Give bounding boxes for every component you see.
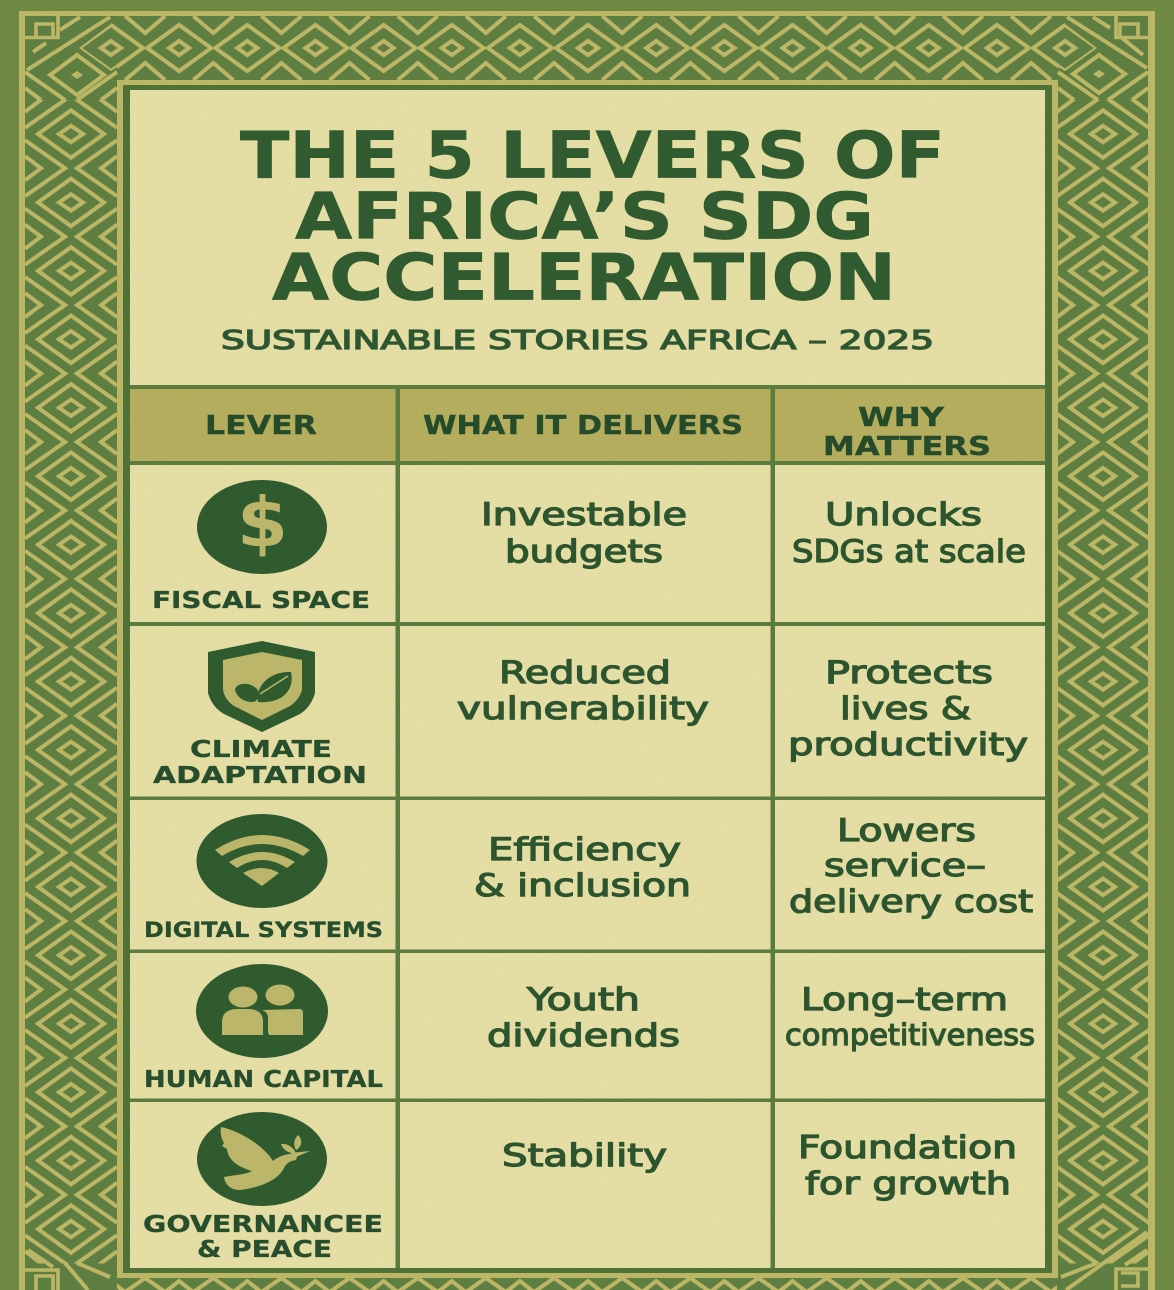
- table header: lever: LEVER: [205, 411, 317, 441]
- why: long-term competitiveness: Long–term: [801, 982, 1008, 1018]
- icon: dove with olive branch: [197, 1112, 327, 1206]
- row 2: climate adaptation: [153, 641, 1028, 789]
- table header: what it delivers: WHAT IT DELIVERS: [423, 411, 743, 441]
- icon: dollar coin: $: [237, 483, 288, 563]
- why: protects lives and productivity: Protects: [825, 655, 993, 691]
- why: lowers service-delivery cost: Lowers: [837, 813, 976, 849]
- corner weave: top left: [25, 16, 117, 100]
- label: governancee and peace: [143, 1212, 383, 1263]
- label: digital systems: DIGITAL SYSTEMS: [144, 918, 383, 942]
- title: THE 5 LEVERS OF: [240, 120, 945, 194]
- table grid lines: [130, 385, 1045, 1268]
- inner panel with frame: [117, 80, 1058, 1278]
- label: governancee and peace: & PEACE: [197, 1237, 332, 1263]
- why: unlocks SDGs at scale: [792, 497, 1026, 570]
- delivers: investable budgets: [481, 497, 687, 570]
- delivers: reduced vulnerability: vulnerability: [457, 691, 709, 727]
- label: governancee and peace: GOVERNANCEE: [143, 1212, 383, 1238]
- why: protects lives and productivity: [788, 655, 1028, 763]
- table header: why matters: MATTERS: [823, 432, 991, 462]
- why: lowers service-delivery cost: service–: [824, 848, 986, 884]
- row 3: digital systems: [144, 813, 1033, 942]
- delivers: youth dividends: dividends: [487, 1018, 680, 1054]
- table header: why matters: [823, 403, 991, 462]
- delivers: stability: Stability: [502, 1138, 667, 1174]
- delivers: reduced vulnerability: [457, 655, 709, 727]
- corner weave: top right: [1058, 16, 1148, 100]
- corner ornament: bottom right: [1115, 1268, 1148, 1290]
- icon: two people: [196, 964, 328, 1058]
- delivers: efficiency and inclusion: Efficiency: [488, 832, 681, 868]
- why: foundation for growth: Foundation: [798, 1130, 1017, 1166]
- delivers: investable budgets: Investable: [481, 497, 687, 533]
- label: climate adaptation: CLIMATE: [190, 737, 332, 763]
- row 4: human capital: [144, 964, 1035, 1093]
- header row band: [130, 389, 1045, 461]
- why: unlocks SDGs at scale: Unlocks: [825, 497, 982, 533]
- why: protects lives and productivity: productivity: [788, 727, 1028, 763]
- delivers: investable budgets: budgets: [505, 534, 663, 570]
- icon: shield with leaves: [208, 641, 315, 732]
- subtitle: SUSTAINABLE STORIES AFRICA – 2025: [221, 326, 934, 356]
- why: unlocks SDGs at scale: SDGs at scale: [792, 534, 1026, 570]
- delivers: youth dividends: Youth: [526, 982, 640, 1018]
- icon: wifi signal: [196, 814, 328, 908]
- row 1: fiscal space: [152, 480, 1026, 614]
- why: long-term competitiveness: competitiveness: [785, 1018, 1035, 1052]
- why: foundation for growth: for growth: [805, 1166, 1011, 1202]
- delivers: efficiency and inclusion: [474, 832, 691, 904]
- label: climate adaptation: ADAPTATION: [153, 763, 367, 789]
- delivers: reduced vulnerability: Reduced: [499, 655, 671, 691]
- label: climate adaptation: [153, 737, 367, 789]
- icon: dollar coin: [197, 480, 327, 574]
- corner ornament: bottom left: [25, 1270, 58, 1290]
- label: human capital: HUMAN CAPITAL: [144, 1067, 383, 1093]
- delivers: efficiency and inclusion: & inclusion: [474, 868, 691, 904]
- corner ornament: top right: [1115, 16, 1148, 38]
- row 5: governance and peace: [143, 1112, 1017, 1263]
- corner ornament: top left: [25, 16, 58, 38]
- delivers: youth dividends: [487, 982, 680, 1054]
- why: long-term competitiveness: [785, 982, 1035, 1052]
- corner weave: bottom right: [1057, 1232, 1148, 1290]
- why: foundation for growth: [798, 1130, 1017, 1202]
- table header: why matters: WHY: [858, 403, 945, 433]
- why: lowers service-delivery cost: delivery cost: [789, 884, 1033, 920]
- corner weave: bottom left: [25, 1250, 117, 1290]
- why: protects lives and productivity: lives &: [840, 691, 971, 727]
- why: lowers service-delivery cost: [789, 813, 1033, 920]
- title: [240, 120, 945, 316]
- title: AFRICA’S SDG: [295, 180, 874, 254]
- label: fiscal space: FISCAL SPACE: [152, 588, 370, 614]
- title: ACCELERATION: [272, 242, 896, 316]
